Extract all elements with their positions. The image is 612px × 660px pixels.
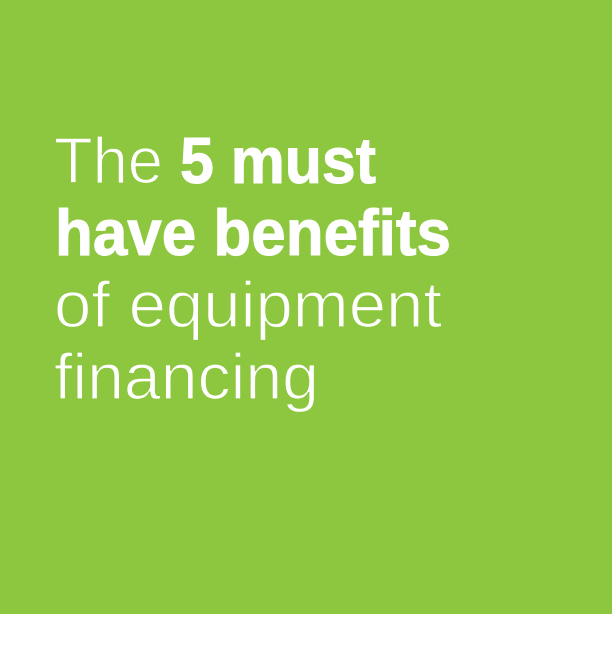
title line 4: financing: financing — [54, 340, 319, 413]
title line 2: have benefits: have benefits — [55, 196, 451, 269]
title line 1: 5 must: 5 must — [180, 124, 376, 197]
title line 3: of equipment: of equipment — [54, 268, 442, 341]
title — [54, 124, 451, 413]
title line 1: The: The — [54, 124, 163, 197]
